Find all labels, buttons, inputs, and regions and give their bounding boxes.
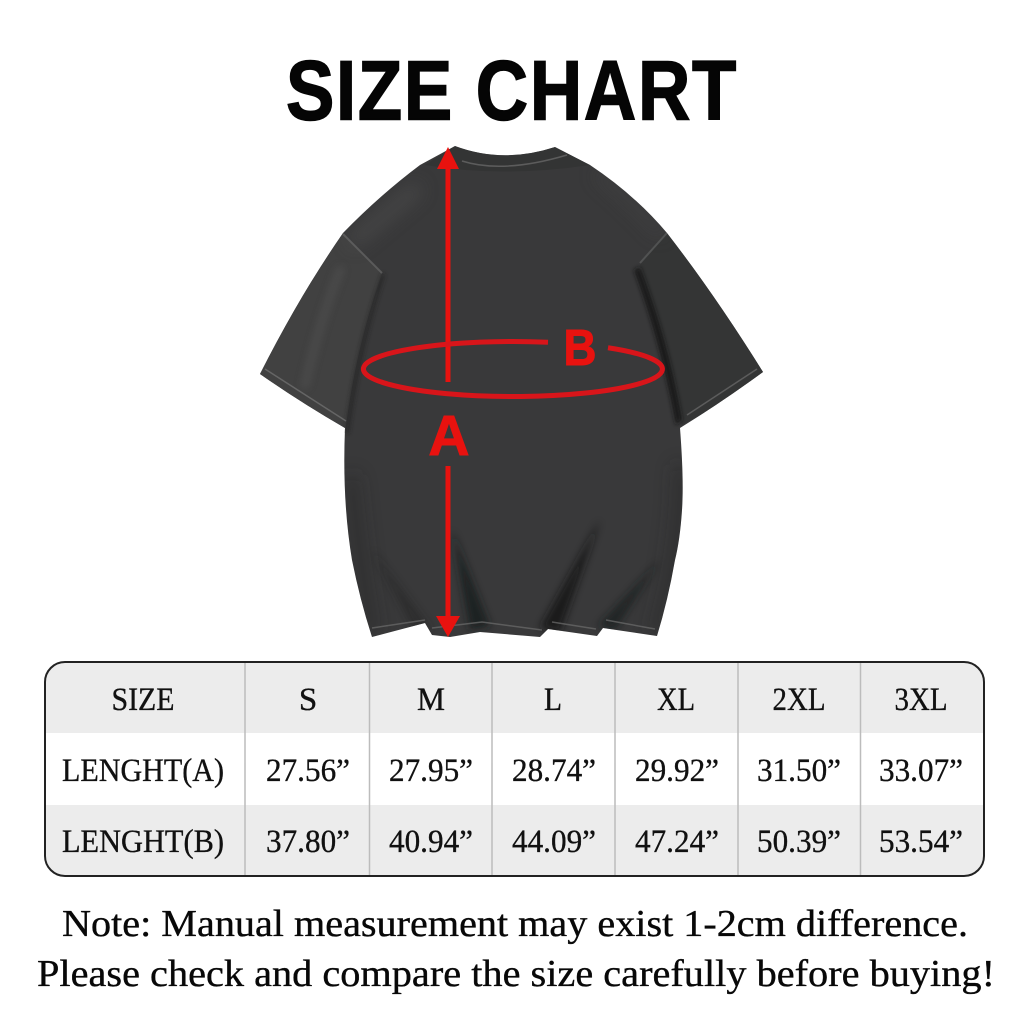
length B row: 53.54” (879, 824, 963, 860)
header row: M (417, 682, 445, 718)
length B row (62, 824, 963, 860)
header row: SIZE (112, 682, 174, 718)
note text (37, 903, 995, 995)
size table (45, 662, 984, 876)
length B row: 50.39” (757, 824, 841, 860)
title: SIZE CHART (286, 44, 738, 138)
right sleeve panel (667, 233, 763, 416)
length A row (62, 753, 963, 789)
t-shirt illustration (250, 140, 775, 645)
length B row: 40.94” (389, 824, 473, 860)
measurement A arrow (436, 147, 460, 637)
length B row: 47.24” (635, 824, 719, 860)
length A row: 27.56” (266, 753, 350, 789)
header row: 3XL (894, 682, 948, 718)
shoulder seams (343, 234, 382, 273)
label B: B (564, 319, 596, 376)
length B row: 44.09” (512, 824, 596, 860)
label A: A (428, 404, 470, 468)
note text: Please check and compare the size carefully before buying! (37, 953, 995, 995)
collar ribbing (452, 146, 590, 165)
header row: L (544, 682, 562, 718)
header row: XL (657, 682, 695, 718)
fold shading (345, 267, 682, 632)
length A row: LENGHT(A) (62, 753, 224, 789)
length A row: 31.50” (757, 753, 841, 789)
length B row: 37.80” (266, 824, 350, 860)
note text: Note: Manual measurement may exist 1-2cm difference. (62, 903, 968, 945)
faded highlights (305, 175, 660, 385)
length A row: 33.07” (879, 753, 963, 789)
measurement B ellipse (363, 341, 662, 396)
header row: S (299, 682, 317, 718)
length B row: LENGHT(B) (62, 824, 224, 860)
length A row: 28.74” (512, 753, 596, 789)
length A row: 27.95” (389, 753, 473, 789)
length A row: 29.92” (635, 753, 719, 789)
sleeve and bottom hems (265, 369, 346, 421)
header row: 2XL (772, 682, 826, 718)
header row (112, 682, 948, 718)
left sleeve panel (260, 233, 345, 433)
